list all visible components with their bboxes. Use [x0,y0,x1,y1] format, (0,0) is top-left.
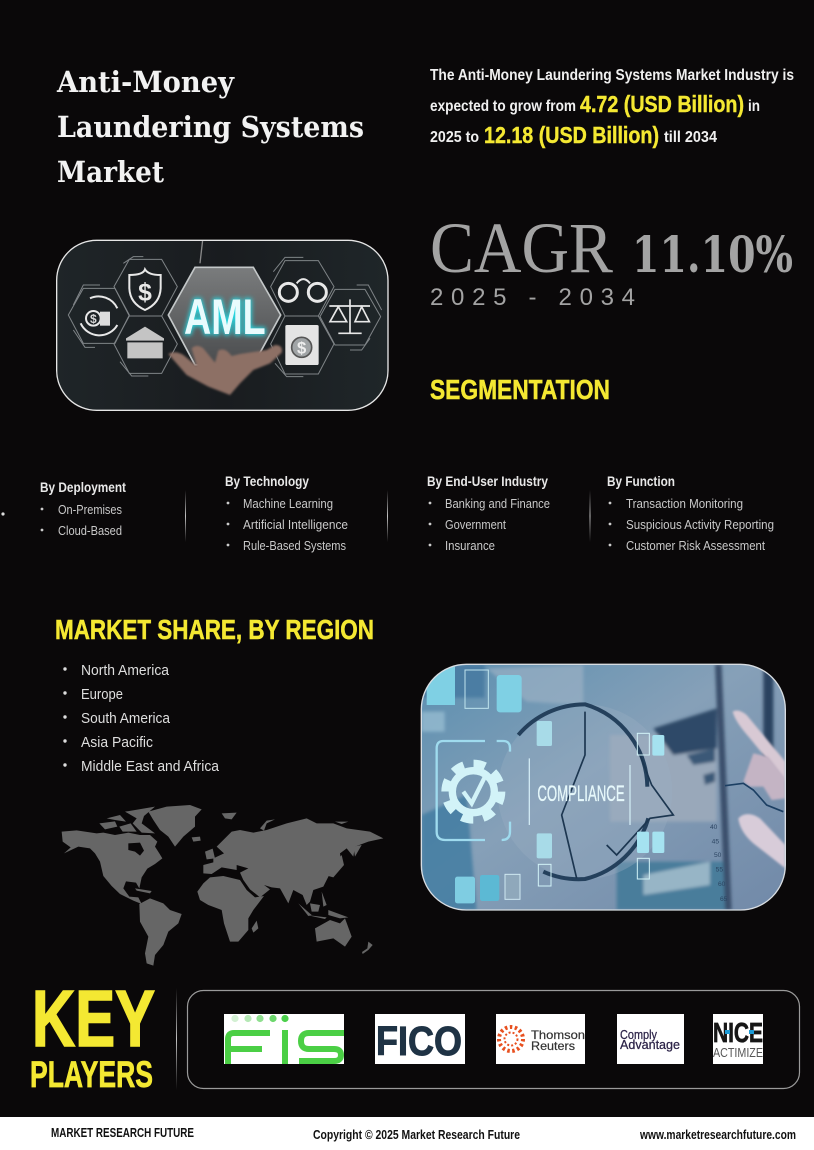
icon glyphs [81,269,370,335]
segment: by technology [225,473,348,553]
magnifier ring [498,704,672,879]
region list: Europe [81,686,123,703]
CAGR callout: 2025 - 2034 [430,284,635,311]
segment: by deployment: By Deployment [40,479,126,495]
illustration: AML hexagons and hand [57,240,388,410]
region list: Middle East and Africa [81,758,220,775]
key players panel [188,990,800,1088]
logo: NICE Actimize: NICE [713,1017,763,1048]
axis numbers: 45 [712,838,719,845]
Arctic islands [99,807,155,833]
small icons [427,667,664,903]
logo: Thomson Reuters: Reuters [531,1039,575,1053]
chart line [562,712,673,878]
axis numbers [710,824,728,903]
logo: FICO: FICO [376,1018,462,1064]
logo: ComplyAdvantage: Advantage [620,1038,680,1052]
segment: by technology: Artificial Intelligence [243,517,348,532]
heading: market share by region: MARKET SHARE, BY REGION [55,614,374,645]
footer: MARKET RESEARCH FUTURE [51,1126,194,1140]
South America [139,898,182,966]
segment: by deployment: On-Premises [58,502,122,517]
Southeast Asia islands [298,892,348,919]
Iceland [192,837,201,842]
Hudson Bay [128,843,144,856]
Japan [328,855,344,877]
illustration: compliance dashboard [421,664,785,910]
Scandinavia and Eurasia [203,818,383,905]
logo: NICE Actimize [713,1014,763,1064]
Australia [315,918,352,947]
key players heading: PLAYERS [30,1054,153,1095]
title: Laundering Systems [57,110,364,144]
key players heading [30,974,155,1095]
axis numbers: 60 [718,881,726,888]
market growth summary: 4.72 (USD Billion) [580,91,744,117]
hand [168,345,282,395]
axis numbers: 50 [714,852,722,859]
label: compliance: COMPLIANCE [537,781,625,806]
region list: Asia Pacific [81,734,153,751]
market growth summary: 12.18 (USD Billion) [484,122,659,148]
illustration: AML hexagons and hand: $ [90,312,97,326]
logo: FIS [224,1014,344,1064]
Svalbard and Arctic [222,813,348,831]
Caribbean [135,888,152,893]
logo: Thomson Reuters [496,1014,585,1064]
label glow: AML [184,289,266,345]
title: Market [57,155,165,189]
title [56,65,364,189]
stray bullet [1,512,5,516]
segment: by end-user industry [427,473,550,553]
segment: by end-user industry: Banking and Finance [445,496,550,511]
logo: ComplyAdvantage [617,1014,684,1064]
axis numbers: 40 [710,824,718,831]
gear panel [437,741,510,840]
market growth summary: expected to grow from [430,98,576,115]
segment: by function: By Function [607,473,675,489]
illustration: AML hexagons and hand: $ [138,280,152,307]
region list: South America [81,710,171,727]
segment: by end-user industry: Insurance [445,538,495,553]
hexagon outlines [68,257,382,377]
label: AML [184,289,266,345]
logo: Thomson Reuters: Thomson [531,1028,585,1042]
heading: segmentation: SEGMENTATION [430,374,610,405]
background charts [421,664,773,910]
footer: Copyright © 2025 Market Research Future [313,1128,520,1142]
central AML hexagon [168,267,281,365]
market growth summary [430,67,794,148]
footer [0,1117,814,1150]
segment: by technology: Machine Learning [243,496,333,511]
segment: by technology: Rule-Based Systems [243,538,346,553]
market growth summary: till 2034 [664,129,717,146]
CAGR callout [430,208,793,311]
title: Anti-Money [56,65,235,99]
segment: by end-user industry: By End-User Industry [427,473,548,489]
segment: by deployment [40,479,126,538]
illustration: AML hexagons and hand: $ [297,339,307,358]
segment: by technology: By Technology [225,473,309,489]
axis numbers: 65 [720,896,728,903]
market growth summary: 2025 to [430,129,479,146]
Greenland [148,805,202,847]
Africa [197,876,264,942]
logo: NICE Actimize: ACTIMIZE [713,1046,763,1060]
region list [63,662,220,775]
segment: by end-user industry: Government [445,517,506,532]
segment: by deployment: Cloud-Based [58,523,122,538]
icon: bank [126,327,164,358]
logo: ComplyAdvantage: Comply [620,1028,658,1042]
Britain [205,849,215,859]
world map [62,805,383,966]
CAGR callout: CAGR [430,208,613,288]
Madagascar [252,921,258,933]
New Zealand [362,942,373,954]
region list: North America [81,662,170,679]
icon: gear check [445,764,501,820]
segment: by function [607,473,774,553]
fingers [733,711,785,782]
North America [62,830,162,904]
Kamchatka [353,845,362,857]
axis numbers: 55 [716,867,723,874]
icon: washing machine [285,325,319,365]
market growth summary: in [748,98,760,115]
segment: by function: Suspicious Activity Reporting [626,517,774,532]
segment: by function: Customer Risk Assessment [626,538,765,553]
segment: by function: Transaction Monitoring [626,496,743,511]
key players heading: KEY [32,974,155,1063]
